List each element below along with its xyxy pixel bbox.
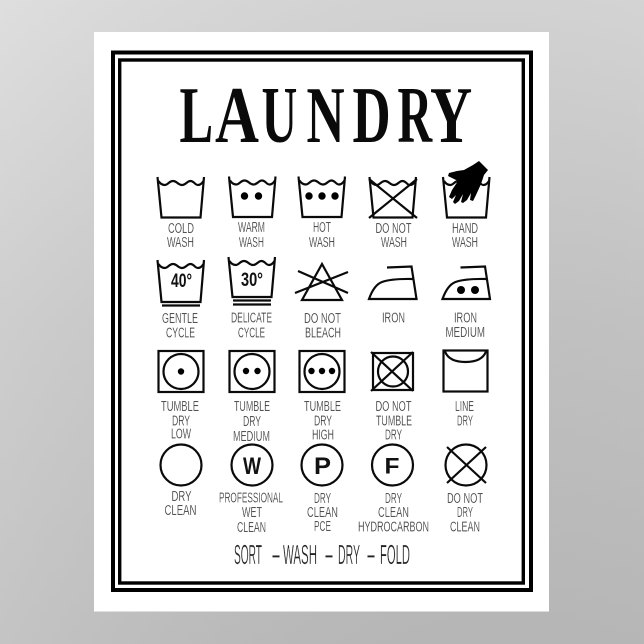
footer slogan: DRY xyxy=(338,539,360,570)
label: TUMBLE xyxy=(304,398,341,415)
icon: tub xyxy=(158,177,204,218)
title: R xyxy=(398,72,433,160)
label: DO NOT xyxy=(304,310,341,327)
icon: crossed circle xyxy=(446,444,486,486)
title xyxy=(180,71,472,160)
label: MEDIUM xyxy=(446,324,485,341)
poster paper xyxy=(94,32,549,612)
label: CLEAN xyxy=(237,519,266,536)
title: A xyxy=(215,72,259,160)
icon: line dry xyxy=(444,350,488,392)
footer slogan xyxy=(234,539,410,570)
title: L xyxy=(180,71,213,160)
tumble dry high xyxy=(300,351,344,444)
footer slogan: SORT xyxy=(234,539,262,570)
icon: circle F: F xyxy=(384,454,400,478)
label: MEDIUM xyxy=(233,428,270,445)
icon: tumble three dots xyxy=(300,351,344,392)
hand wash xyxy=(443,161,490,251)
warm wash xyxy=(229,176,276,251)
label: WASH xyxy=(452,234,478,251)
do not dry clean xyxy=(446,444,486,536)
label: DRY xyxy=(457,412,473,430)
label: WASH xyxy=(381,234,407,251)
label: DO NOT xyxy=(376,220,412,237)
iron medium xyxy=(442,266,490,341)
label: TUMBLE xyxy=(161,398,199,415)
icon: tub 30 degrees: 30° xyxy=(241,270,263,291)
text: FOLD xyxy=(380,539,410,570)
dry clean pce xyxy=(302,444,342,535)
icon: tub with hand xyxy=(443,161,490,218)
tumble dry medium xyxy=(230,351,274,445)
inner border xyxy=(120,60,523,583)
icon: crossed triangle xyxy=(295,264,348,300)
delicate cycle xyxy=(228,257,275,342)
footer slogan: - xyxy=(366,539,376,570)
line dry xyxy=(444,350,488,430)
icon: tub three dots xyxy=(298,176,345,217)
label: CYCLE xyxy=(238,324,265,342)
title: N xyxy=(306,71,345,160)
label: WASH xyxy=(239,234,264,251)
professional wet clean xyxy=(219,444,283,536)
label: CLEAN xyxy=(378,504,409,521)
label: HYDROCARBON xyxy=(358,518,429,536)
label: IRON xyxy=(454,310,477,326)
label: DRY xyxy=(457,504,473,521)
label: DO NOT xyxy=(447,490,483,507)
label: DRY xyxy=(172,412,190,430)
label: CYCLE xyxy=(166,324,195,342)
label: CLEAN xyxy=(450,518,480,536)
icon: iron xyxy=(369,266,416,299)
footer slogan: WASH xyxy=(283,539,317,570)
label: DRY xyxy=(243,413,261,430)
title: D xyxy=(352,71,391,160)
do not wash xyxy=(369,177,417,251)
label: WASH xyxy=(167,234,194,251)
label: TUMBLE xyxy=(234,398,270,415)
icon: tub two dots xyxy=(229,176,276,217)
dry clean xyxy=(160,444,202,519)
label: GENTLE xyxy=(162,310,198,327)
do not bleach xyxy=(295,264,348,342)
outer border xyxy=(113,52,531,590)
label: DRY xyxy=(314,490,331,507)
icon: crossed tumble xyxy=(371,352,413,391)
icon: circle P: P xyxy=(314,453,331,480)
hot wash xyxy=(298,176,345,251)
do not tumble dry xyxy=(371,352,413,444)
title: Y xyxy=(430,72,472,160)
iron xyxy=(369,266,416,326)
icon: iron two dots xyxy=(442,266,490,299)
label: COLD xyxy=(168,220,194,237)
title: U xyxy=(262,72,297,160)
label: DRY xyxy=(385,490,402,507)
label: CLEAN xyxy=(164,502,196,519)
label: HIGH xyxy=(312,426,334,444)
icon: tub 40 degrees: 40° xyxy=(171,271,192,292)
label: TUMBLE xyxy=(376,412,412,430)
label: DRY xyxy=(314,412,332,430)
icon: circle W: W xyxy=(243,453,261,480)
label: WASH xyxy=(309,234,335,251)
footer slogan: - xyxy=(271,539,281,570)
gentle cycle xyxy=(158,260,204,342)
label: HAND xyxy=(452,220,478,237)
label: PROFESSIONAL xyxy=(219,490,283,506)
dry clean hydrocarbon xyxy=(358,444,429,536)
icon: tumble two dots xyxy=(230,351,274,392)
footer slogan: - xyxy=(324,539,334,570)
label: LINE xyxy=(455,398,474,415)
cold wash xyxy=(158,177,204,251)
label: LOW xyxy=(171,426,191,442)
label: IRON xyxy=(382,310,405,326)
label: DRY xyxy=(172,488,192,505)
label: WARM xyxy=(238,219,265,236)
label: DRY xyxy=(385,426,402,444)
label: BLEACH xyxy=(305,324,341,342)
label: DO NOT xyxy=(376,398,412,415)
label: CLEAN xyxy=(307,504,338,521)
tumble dry low xyxy=(158,351,204,442)
label: HOT xyxy=(313,219,331,236)
icon: circle xyxy=(160,444,202,486)
label: DELICATE xyxy=(231,310,272,326)
icon: crossed tub xyxy=(369,177,417,218)
label: PCE xyxy=(314,518,331,535)
label: WET xyxy=(242,504,262,521)
icon: tumble one dot xyxy=(158,351,204,392)
